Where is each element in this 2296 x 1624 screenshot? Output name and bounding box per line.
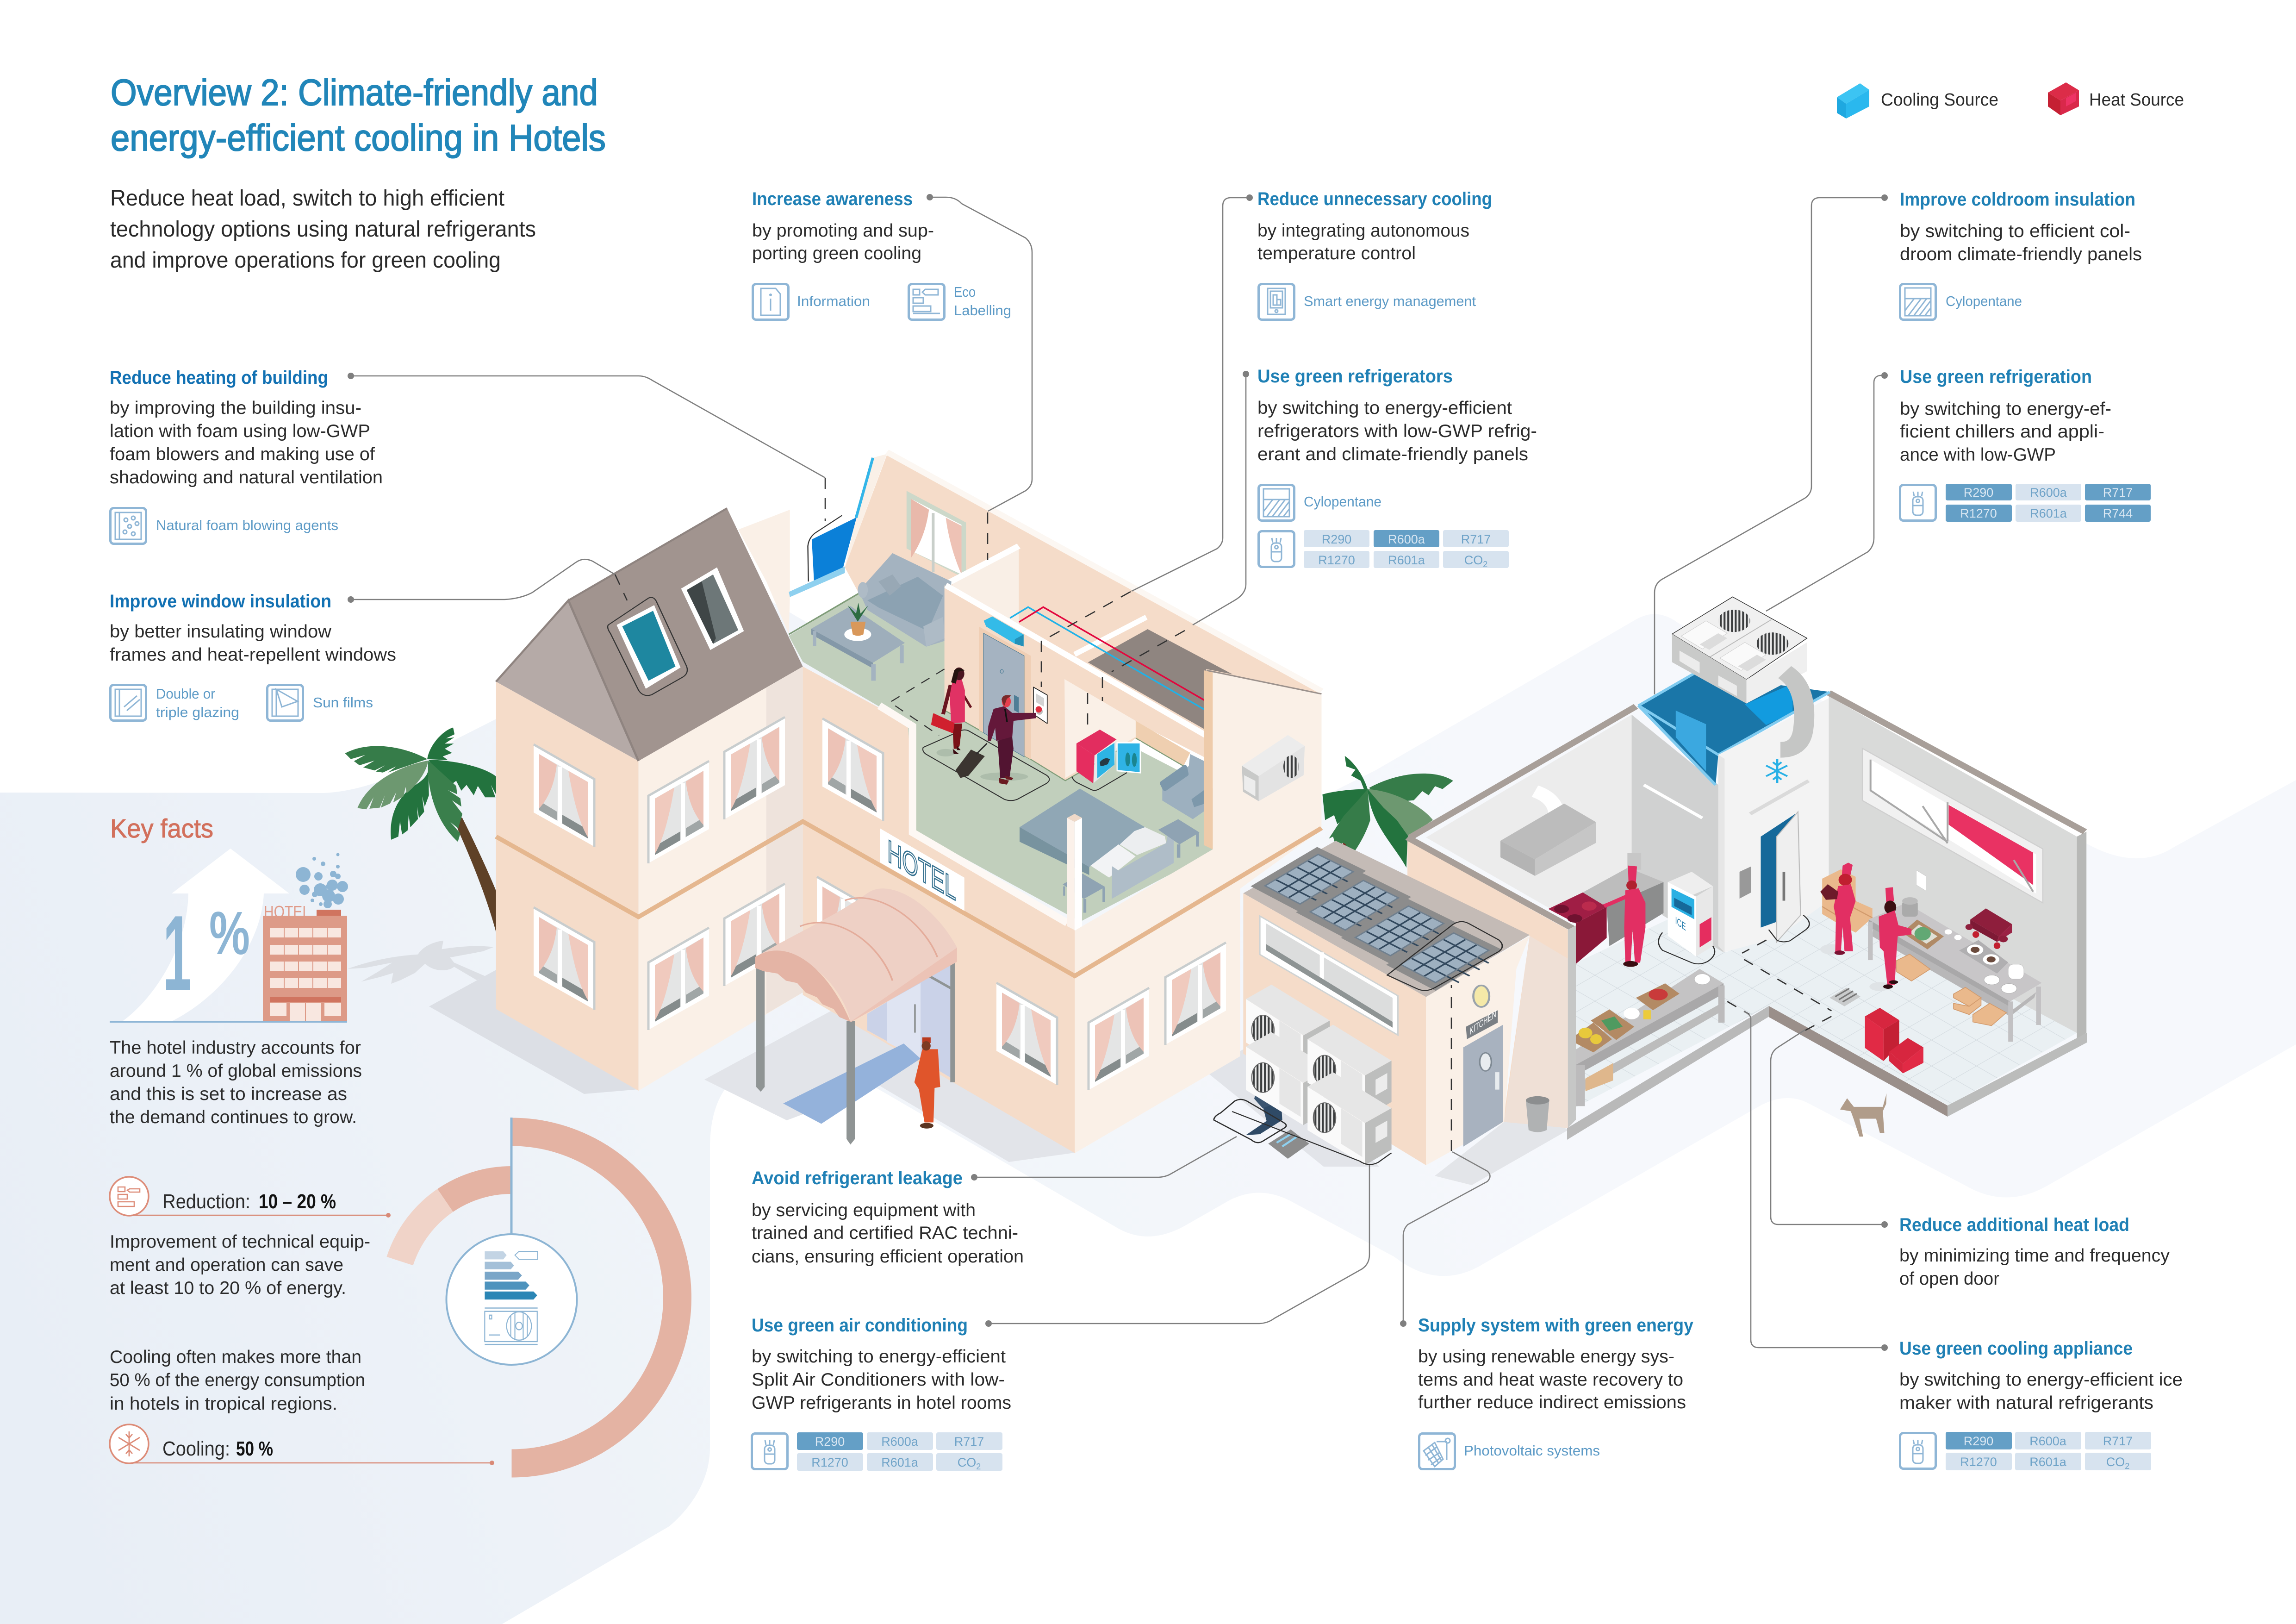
text block: reduce unnecessary cooling: temperature control [1257,244,1416,263]
big figure 1 percent [163,893,250,1013]
outer peach wall [1407,841,1568,1128]
text block: reduce heating of building [110,368,383,487]
text block: use green air conditioning: Split Air Conditioners with low- [752,1370,1005,1390]
label: natural foam: Natural foam blowing agents [156,517,338,533]
inner arc reduction [445,1180,512,1200]
food crates [1576,974,1710,1052]
hotel building icon [263,902,347,1022]
snowflake [1766,759,1787,783]
hotel exterior walls [496,508,1321,1153]
text block: improve window insulation [110,591,396,665]
room rim and column [879,706,1082,931]
kitchen door [1463,1024,1503,1147]
cold room column [1718,698,1829,952]
hotel windows [534,717,1226,1090]
icon: refrigerant bottle [1259,531,1294,567]
text block: improve coldroom insulation: droom climate-friendly panels [1900,244,2142,264]
floor drain [1829,988,1860,1006]
chef with produce [1820,862,1856,955]
tool case [1268,1130,1309,1159]
outline around condensers [1232,1112,1392,1165]
chips: refrigerators [1304,530,1509,569]
text block: improve coldroom insulation: by switching to efficient col- [1900,221,2130,241]
HOTEL sign: HOTEL [887,833,956,907]
kitchen sign: KITCHEN [1469,1007,1496,1037]
label: double glazing [156,686,239,720]
icon: cylopentane coldroom [1900,284,1935,319]
text block: supply system with green energy: by using renewable energy sys- [1418,1347,1674,1367]
front prep table [1576,969,1724,1106]
text block: increase awareness: Increase awareness [752,189,913,209]
woman guest [932,668,971,756]
chips: cooling appliance: 2 [2125,1462,2129,1471]
label: cylopentane coldroom: Cylopentane [1946,293,2022,309]
inner arc remainder [400,1200,445,1261]
leader line: coldroom insulation [1655,194,1888,694]
dish warmer [1966,908,2012,949]
trash bin [1526,1096,1549,1132]
text block: reduce unnecessary cooling [1257,189,1492,263]
reduction text: Improvement of technical equip- [110,1232,370,1252]
key facts heading: Key facts [110,814,213,843]
chips: cooling appliance: R600a [2029,1434,2067,1448]
reduction row [110,1177,391,1218]
text block: use green refrigerators: Use green refrigerators [1257,366,1453,387]
roof window right [681,568,744,650]
back kitchen details [1727,749,2043,1137]
cartons under table [1897,954,2006,1026]
cooling row [110,1424,494,1465]
glass doors [867,962,954,1082]
text block: use green refrigeration: ance with low-GWP [1900,445,2056,465]
solar panels [1251,847,1501,991]
ice maker: ICE [1675,914,1686,933]
energy label circle [446,1234,577,1365]
key fact text: hotel industry [110,1038,362,1127]
armchair [1162,754,1206,819]
rear side wall [738,510,803,667]
text block: improve coldroom insulation: Improve coldroom insulation [1900,189,2135,210]
insulation panel [789,458,873,597]
reduction row: Reduction: [162,1190,250,1213]
text block: reduce unnecessary cooling: by integrating autonomous [1257,221,1469,241]
floor outline loop [923,730,1049,800]
icon: photovoltaic [1419,1433,1455,1469]
annex front face [1426,936,1530,1165]
storey band [496,821,1321,976]
text block: use green refrigeration [1900,367,2111,465]
text block: reduce heating of building: lation with foam using low-GWP [110,421,370,441]
wall window [1862,749,2043,903]
text block: use green refrigerators: by switching to energy-efficient [1257,398,1512,418]
cooling text: Cooling often makes more than [110,1347,361,1367]
chips: refrigeration [1946,484,2151,522]
dashed floor line [890,669,945,736]
chips: refrigerators: R1270 [1318,553,1355,567]
outline around solar panel [1387,922,1502,991]
ice maker [1668,872,1713,956]
sofa [858,553,952,647]
label: information: Information [797,293,870,309]
chart: donut energy share [400,1118,678,1463]
text block: use green refrigerators: refrigerators with low-GWP refrig- [1257,421,1537,441]
chips: air conditioning [797,1432,1002,1471]
chips: cooling appliance: R717 [2103,1434,2133,1448]
kitchen floor [1567,901,2087,1140]
chips: cooling appliance [1946,1432,2151,1471]
chips: refrigerators: 2 [1483,560,1487,569]
text block: use green air conditioning: by switching to energy-efficient [752,1347,1006,1367]
leader line: green refrigeration [1766,372,1888,611]
door floor loop [1769,915,1809,942]
thermostat [1033,687,1047,724]
heat source boxes [1865,1008,1923,1073]
inner partition [1632,715,1724,952]
leader line: refrigerant leakage [971,1137,1237,1181]
text block: increase awareness: porting green cooling [752,244,921,263]
wall AC unit [1242,735,1305,801]
text block: supply system with green energy: Supply system with green energy [1418,1315,1694,1336]
roof window with outline [608,598,687,695]
chips: cooling appliance: R1270 [1960,1455,1997,1469]
chips: air conditioning: R600a [881,1435,919,1449]
chips: cooling appliance: R290 [1964,1434,1993,1448]
stacked cartons [1822,869,1873,933]
chips: refrigeration: R717 [2103,486,2133,500]
back window [907,491,966,579]
text block: reduce heating of building: Reduce heating of building [110,368,328,388]
range hood [1500,791,1596,876]
icon: refrigerant bottle 2 [1900,485,1935,520]
text block: use green air conditioning [752,1315,1011,1413]
text block: supply system with green energy: tems and heat waste recovery to [1418,1370,1683,1390]
chips: refrigerators: R290 [1322,532,1351,546]
key fact text: hotel industry: and this is set to increase as [110,1084,347,1104]
cold room roof cut [1638,673,1830,785]
key fact text: hotel industry: The hotel industry accounts for [110,1038,361,1058]
palm tree shadow [348,941,493,984]
title: Overview 2: Climate-friendly and [111,72,598,113]
leader line: additional heat load [1771,1030,1888,1228]
cooling row: Cooling: [162,1437,230,1460]
icon: cylopentane [1259,485,1294,520]
text block: use green refrigeration: ficient chillers and appli- [1900,422,2104,442]
icon: refrigerant bottle 3 [752,1433,788,1469]
text block: use green refrigeration: by switching to energy-ef- [1900,399,2111,419]
man guest [980,695,1042,785]
wall rims [1407,693,2085,930]
icon: sun films [268,685,303,720]
label: double glazing: triple glazing [156,704,239,720]
rolling suitcase [956,743,987,778]
label: eco labelling [954,284,1011,319]
big figure 1 percent: % [209,899,250,967]
canopy [755,888,957,1022]
text block: supply system with green energy: further reduce indirect emissions [1418,1393,1686,1412]
oven and counter [1548,853,1663,964]
chips: cooling appliance: R601a [2029,1455,2067,1469]
label: eco labelling: Eco [954,284,976,300]
text block: improve window insulation: Improve window insulation [110,591,331,612]
big figure 1 percent: 1 [163,893,192,1013]
icon: information [753,284,789,319]
room floor [789,593,1215,922]
text block: reduce additional heat load [1899,1215,2170,1289]
text block: supply system with green energy [1418,1315,1694,1412]
subtitle: and improve operations for green cooling [110,248,501,273]
key fact text: hotel industry: around 1 % of global emissions [110,1061,362,1081]
hotel building icon: HOTEL [264,902,310,921]
subtitle: Reduce heat load, switch to high efficient [110,186,504,211]
text block: avoid refrigerant leakage: trained and certified RAC techni- [752,1223,1018,1243]
cooling text: in hotels in tropical regions. [110,1394,337,1414]
text block: use green cooling appliance: maker with natural refrigerants [1899,1393,2153,1413]
canopy posts [756,967,855,1144]
HOTEL sign [880,829,964,911]
chips: air conditioning: 2 [976,1462,981,1471]
technician floor loop [1214,1099,1286,1143]
right wall [1075,672,1321,1153]
background blob [0,583,2296,1624]
chips: air conditioning: R290 [815,1435,845,1449]
doorman [915,1037,940,1129]
text block: increase awareness: by promoting and sup- [752,221,934,241]
gable roof [496,508,803,761]
label: eco labelling: Labelling [954,302,1011,319]
coffee table [811,606,905,681]
outdoor condenser units [1246,985,1392,1165]
round light [1473,986,1489,1007]
icon: foam [110,508,146,543]
leader line: increase awareness [927,194,1032,560]
label: photovoltaic: Photovoltaic systems [1464,1443,1600,1459]
leader line: cooling appliance [1744,1012,1888,1351]
title [111,72,606,158]
text block: reduce additional heat load: of open door [1899,1269,1999,1289]
mini fridge [1072,730,1141,790]
text block: avoid refrigerant leakage: Avoid refrigerant leakage [752,1168,963,1188]
chips: air conditioning: CO [958,1455,976,1469]
back prep table [1868,903,2042,1042]
icon: eco labelling [909,284,944,319]
emission bubbles [296,853,348,908]
label: double glazing: Double or [156,686,215,702]
kitchen sign [1466,1007,1498,1039]
technician [1246,1068,1292,1135]
dog [1840,1093,1886,1137]
note on wall [1916,870,1926,891]
left wing side face [496,681,639,1091]
text block: improve window insulation: frames and heat-repellent windows [110,645,396,665]
leader line: reduce heating [348,373,825,521]
leader line: green refrigerators [1088,371,1249,734]
text block: use green cooling appliance [1899,1338,2183,1413]
text block: reduce unnecessary cooling: Reduce unnecessary cooling [1257,189,1492,209]
text block: reduce heating of building: by improving the building insu- [110,398,361,418]
annex and kitchen outer wall [1232,841,1568,1165]
growth arrow [123,849,289,1021]
icon: double glazing [110,685,146,720]
chips: refrigerators: R717 [1461,532,1491,546]
chips: refrigerators: CO [1464,553,1483,567]
text block: improve window insulation: by better insulating window [110,622,332,642]
reduction row: 10 – 20 % [259,1190,336,1213]
text block: improve coldroom insulation [1900,189,2142,264]
kitchen walls [1407,597,2086,1128]
palm tree left [345,727,498,938]
text block: reduce heating of building: shadowing and natural ventilation [110,468,383,487]
chips: refrigeration: R1270 [1960,506,1997,520]
chips: air conditioning: R601a [881,1455,919,1469]
condenser units on roof [1672,597,1807,704]
right wall [1829,696,2077,1033]
text block: use green refrigeration: Use green refrigeration [1900,367,2092,387]
dark ceiling opening [1088,629,1232,730]
text block: use green cooling appliance: by switching to energy-efficient ice [1899,1370,2183,1390]
annex long window [1260,916,1398,1035]
text block: use green refrigerators: erant and climate-friendly panels [1257,444,1528,464]
chips: refrigeration: R290 [1964,486,1993,500]
cold room door [1740,781,1809,942]
label: sun films: Sun films [313,694,373,711]
reduction text: at least 10 to 20 % of energy. [110,1278,346,1298]
hotel building shell back [738,452,1321,922]
reduction text [110,1232,370,1298]
chips: refrigerators: R600a [1388,532,1425,546]
chips: cooling appliance: CO [2106,1455,2125,1469]
bed [1020,788,1200,913]
chips: air conditioning: R717 [954,1435,984,1449]
label: cylopentane: Cylopentane [1304,493,1381,510]
icon: smart energy [1259,284,1294,319]
ice maker floor loop [1659,932,1715,964]
key fact: 1 percent graphic [110,849,348,1022]
text block: use green cooling appliance: Use green cooling appliance [1899,1338,2133,1359]
chips: air conditioning: R1270 [811,1455,848,1469]
text block: use green refrigerators [1257,366,1537,464]
produce tray [1902,919,1944,949]
annex side face [1243,893,1426,1165]
plates [1945,929,2024,993]
text block: reduce additional heat load: by minimizing time and frequency [1899,1246,2170,1266]
text block: reduce heating of building: foam blowers and making use of [110,444,375,464]
refrigerant pipes [1010,607,1206,710]
partition wall [945,585,1206,781]
ground shadows [429,970,1569,1185]
chef at oven [1604,866,1645,967]
left wing front face [639,667,803,1091]
cooling text [110,1347,365,1414]
entrance mat [783,1043,921,1124]
text block: avoid refrigerant leakage: by servicing equipment with [752,1200,976,1220]
chips: refrigeration: R600a [2030,486,2067,500]
legend: cooling and heat source: Cooling Source [1881,90,1998,110]
chips: refrigerators: R601a [1388,553,1425,567]
chef cutting [1869,887,1911,991]
leader line: green energy [1400,985,1490,1327]
leader line: window insulation [348,559,627,603]
text block: increase awareness [752,189,934,263]
reduction icon [110,1177,149,1216]
snowflake icon [110,1424,149,1463]
hotel entrance [755,888,1309,1159]
dashed floor route [1727,940,1831,1031]
legend: cooling and heat source: Heat Source [2089,90,2184,110]
text block: avoid refrigerant leakage [752,1168,1024,1267]
annex roof [1243,841,1530,997]
cooling text: 50 % of the energy consumption [110,1370,365,1390]
title: energy-efficient cooling in Hotels [111,117,606,158]
chips: refrigeration: R744 [2103,506,2133,520]
guest room interior [890,585,1232,913]
split AC cassette [984,617,1024,646]
icon: refrigerant bottle 4 [1900,1433,1935,1468]
room door [979,626,1031,759]
legend: cooling and heat source [1837,82,2184,119]
front wall [803,667,1075,1153]
subtitle [110,186,536,273]
text block: use green air conditioning: GWP refrigerants in hotel rooms [752,1393,1011,1413]
plant [848,603,868,636]
text block: avoid refrigerant leakage: cians, ensuring efficient operation [752,1247,1024,1267]
duct [1780,672,1804,750]
subtitle: technology options using natural refrigerants [110,217,536,242]
leader line: green air conditioning [985,1165,1369,1327]
pot [1902,897,1918,917]
chips: refrigeration: R601a [2030,506,2067,520]
key fact text: hotel industry: the demand continues to grow. [110,1107,357,1127]
reduction text: ment and operation can save [110,1255,343,1275]
leader line: unnecessary cooling [1041,194,1253,687]
text block: use green air conditioning: Use green air conditioning [752,1315,968,1336]
text block: reduce additional heat load: Reduce additional heat load [1899,1215,2129,1235]
label: smart energy: Smart energy management [1304,293,1476,309]
cooling row: 50 % [236,1437,273,1460]
back left wall [1426,715,1632,924]
outer arc cooling [512,1132,678,1463]
palm tree right [1322,756,1453,868]
